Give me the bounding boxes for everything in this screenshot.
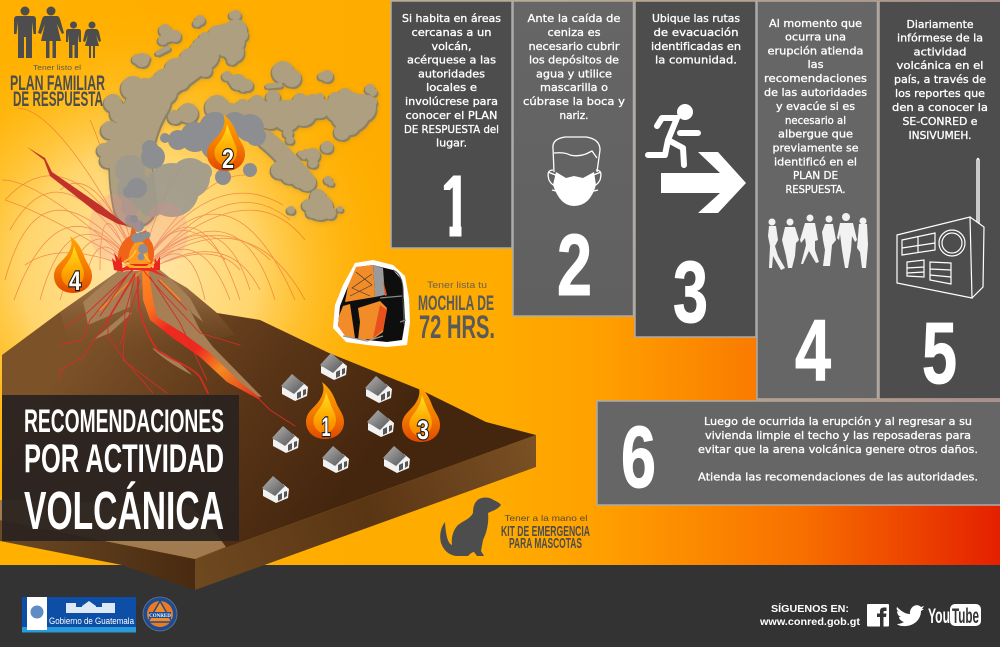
family plan: DE RESPUESTA — [13, 88, 103, 111]
panel: step 4: necesario al — [785, 114, 846, 127]
panel: step 6: Luego de ocurrida la erupción y al regresar a su — [704, 415, 972, 428]
pet kit caption: PARA MASCOTAS — [509, 535, 582, 552]
lower smoke lobe — [115, 155, 212, 217]
panel: step 2: necesario cubrir — [528, 40, 620, 53]
backpack caption: MOCHILA DE — [418, 292, 494, 315]
panel: step 1 — [391, 1, 512, 255]
footer bar — [0, 565, 1000, 647]
panel: step 5: los reportes que — [895, 87, 985, 100]
panel: step 1: lugar. — [436, 136, 467, 150]
follow us text — [759, 602, 861, 628]
backpack — [333, 260, 410, 347]
panel: step 4: recomendaciones — [764, 72, 867, 85]
icon: dog — [440, 498, 501, 556]
flame marker 2 — [207, 114, 245, 174]
title box: VOLCÁNICA — [24, 481, 224, 541]
family plan: PLAN FAMILIAR — [10, 72, 105, 95]
family plan: Tener listo el — [33, 63, 81, 72]
icon: twitter — [897, 605, 924, 626]
pet kit caption — [501, 513, 590, 552]
panel: step 4 — [757, 1, 878, 399]
panel: step 4: erupción atienda — [768, 44, 864, 58]
icon: radio — [897, 158, 984, 298]
panel: step 1: involúcrese para — [405, 95, 498, 108]
pet kit caption: Tener a la mano el — [504, 513, 588, 523]
panel: step 1: autoridades — [418, 68, 485, 80]
panel: step 2: nariz. — [560, 109, 588, 122]
panel: step 5: 5 — [922, 305, 957, 402]
volcano glow — [0, 0, 400, 530]
backpack caption: 72 HRS. — [419, 309, 495, 345]
icon: face mask — [548, 137, 601, 206]
panel: step 4: RESPUESTA. — [786, 183, 846, 196]
panel: step 1: acérquese a las — [407, 54, 496, 66]
panel: step 4: ocurra una — [785, 30, 846, 44]
panel: step 5: actividad — [914, 46, 966, 58]
panel: step 5: den a conocer la — [892, 101, 988, 114]
arrow — [661, 152, 746, 213]
logo: Gobierno de Guatemala: Gobierno de Guatemala — [49, 616, 134, 626]
title box: RECOMENDACIONES — [24, 403, 224, 439]
panel: step 2: cúbrase la boca y — [523, 95, 626, 108]
crater eruption fire — [112, 215, 168, 278]
eruption ejecta arcs — [2, 108, 305, 300]
family plan — [10, 6, 105, 111]
panel: step 1: DE RESPUESTA del — [404, 123, 499, 136]
icon: family — [14, 6, 101, 58]
panel: step 5: infórmese de la — [897, 32, 983, 44]
icon: YouTube — [928, 604, 981, 628]
panel: step 1: cercanas a un — [412, 26, 492, 39]
panel: step 4: PLAN DE — [793, 169, 838, 182]
flame marker 1 — [306, 382, 344, 442]
flame marker 3: 3 — [417, 415, 429, 445]
panel: step 1: Si habita en áreas — [402, 12, 501, 25]
logo: CONRED — [143, 597, 177, 631]
panel: step 5: volcánica en el — [896, 59, 984, 72]
panel: step 4: y evacúe si es — [776, 100, 855, 113]
backpack caption: Tener lista tu — [427, 280, 487, 290]
flame marker 1: 1 — [322, 412, 330, 442]
houses — [262, 353, 410, 503]
panel: step 5: INSIVUMEH. — [908, 129, 972, 142]
panel: step 5: país, a través de — [894, 73, 986, 86]
panel: step 5: SE-CONRED e — [902, 115, 978, 128]
lava glow lobes — [89, 194, 188, 262]
panel: step 3: 3 — [673, 244, 708, 341]
panel: step 4: las — [808, 58, 824, 71]
flame marker 4: 4 — [69, 266, 81, 296]
panel: step 3: la comunidad. — [655, 54, 737, 66]
lava fissure — [27, 147, 128, 226]
panel: step 6: vivienda limpie el techo y las reposaderas para — [705, 429, 971, 442]
follow us text: www.conred.gob.gt — [759, 616, 861, 628]
panel: step 1: conocer el PLAN — [406, 109, 498, 122]
panel: step 4: previamente se — [772, 142, 859, 154]
panel: step 4: identificó en el — [774, 156, 857, 168]
logo: Gobierno de Guatemala — [22, 597, 136, 632]
panel: step 4: de las autoridades — [764, 86, 867, 99]
panel: step 6: 6 — [621, 409, 656, 506]
panel: step 5: Diariamente — [906, 18, 974, 31]
panel: step 6: Atienda las recomendaciones de las autoridades. — [698, 470, 978, 484]
panel: step 2: ceniza es — [548, 26, 601, 39]
pet kit caption: KIT DE EMERGENCIA — [501, 523, 590, 540]
panel: step 2: agua y utilice — [536, 68, 612, 80]
panel: step 6 — [597, 401, 1000, 506]
panel: step 4: 4 — [795, 302, 831, 399]
lava streams — [142, 268, 260, 400]
icon: YouTube: You — [928, 605, 950, 628]
panel: step 2: los depósitos de — [529, 54, 619, 66]
title box — [2, 395, 239, 541]
tan facets — [83, 270, 262, 397]
panel: step 1: locales e — [426, 81, 477, 94]
title box: POR ACTIVIDAD — [24, 437, 224, 481]
panel: step 2: 2 — [557, 217, 592, 314]
panel: step 4: albergue que — [778, 128, 853, 140]
panel: step 1: 1 — [440, 158, 470, 255]
panel: step 4: Al momento que — [769, 17, 862, 30]
panel: step 3: de evacuación — [654, 26, 739, 39]
volcano and terrain block — [0, 268, 536, 590]
panel: step 3: Ubique las rutas — [652, 12, 740, 25]
flame marker 4 — [54, 236, 92, 296]
flame marker 2: 2 — [222, 144, 234, 174]
panel: step 3: identificadas en — [651, 40, 741, 53]
panel: step 2: Ante la caída de — [528, 12, 621, 25]
panel: step 2: mascarilla o — [540, 81, 608, 94]
grey ash — [123, 112, 266, 232]
icon: running person — [648, 104, 698, 165]
icon: YouTube: Tube — [952, 605, 979, 628]
flame marker 3 — [402, 385, 440, 445]
logo: CONRED: CONRED — [149, 614, 171, 619]
panel: step 6: evitar que la arena volcánica genere otros daños. — [698, 443, 978, 456]
panel: step 3 — [635, 1, 756, 341]
ash cloud — [96, 10, 378, 232]
panel: step 1: volcán, — [432, 40, 472, 53]
icon: facebook — [867, 604, 889, 626]
backpack caption — [418, 280, 495, 345]
icon: group of people — [768, 213, 868, 270]
panel: step 5 — [879, 1, 1000, 402]
follow us text: SÍGUENOS EN: — [771, 602, 849, 615]
panel: step 2 — [513, 1, 634, 316]
